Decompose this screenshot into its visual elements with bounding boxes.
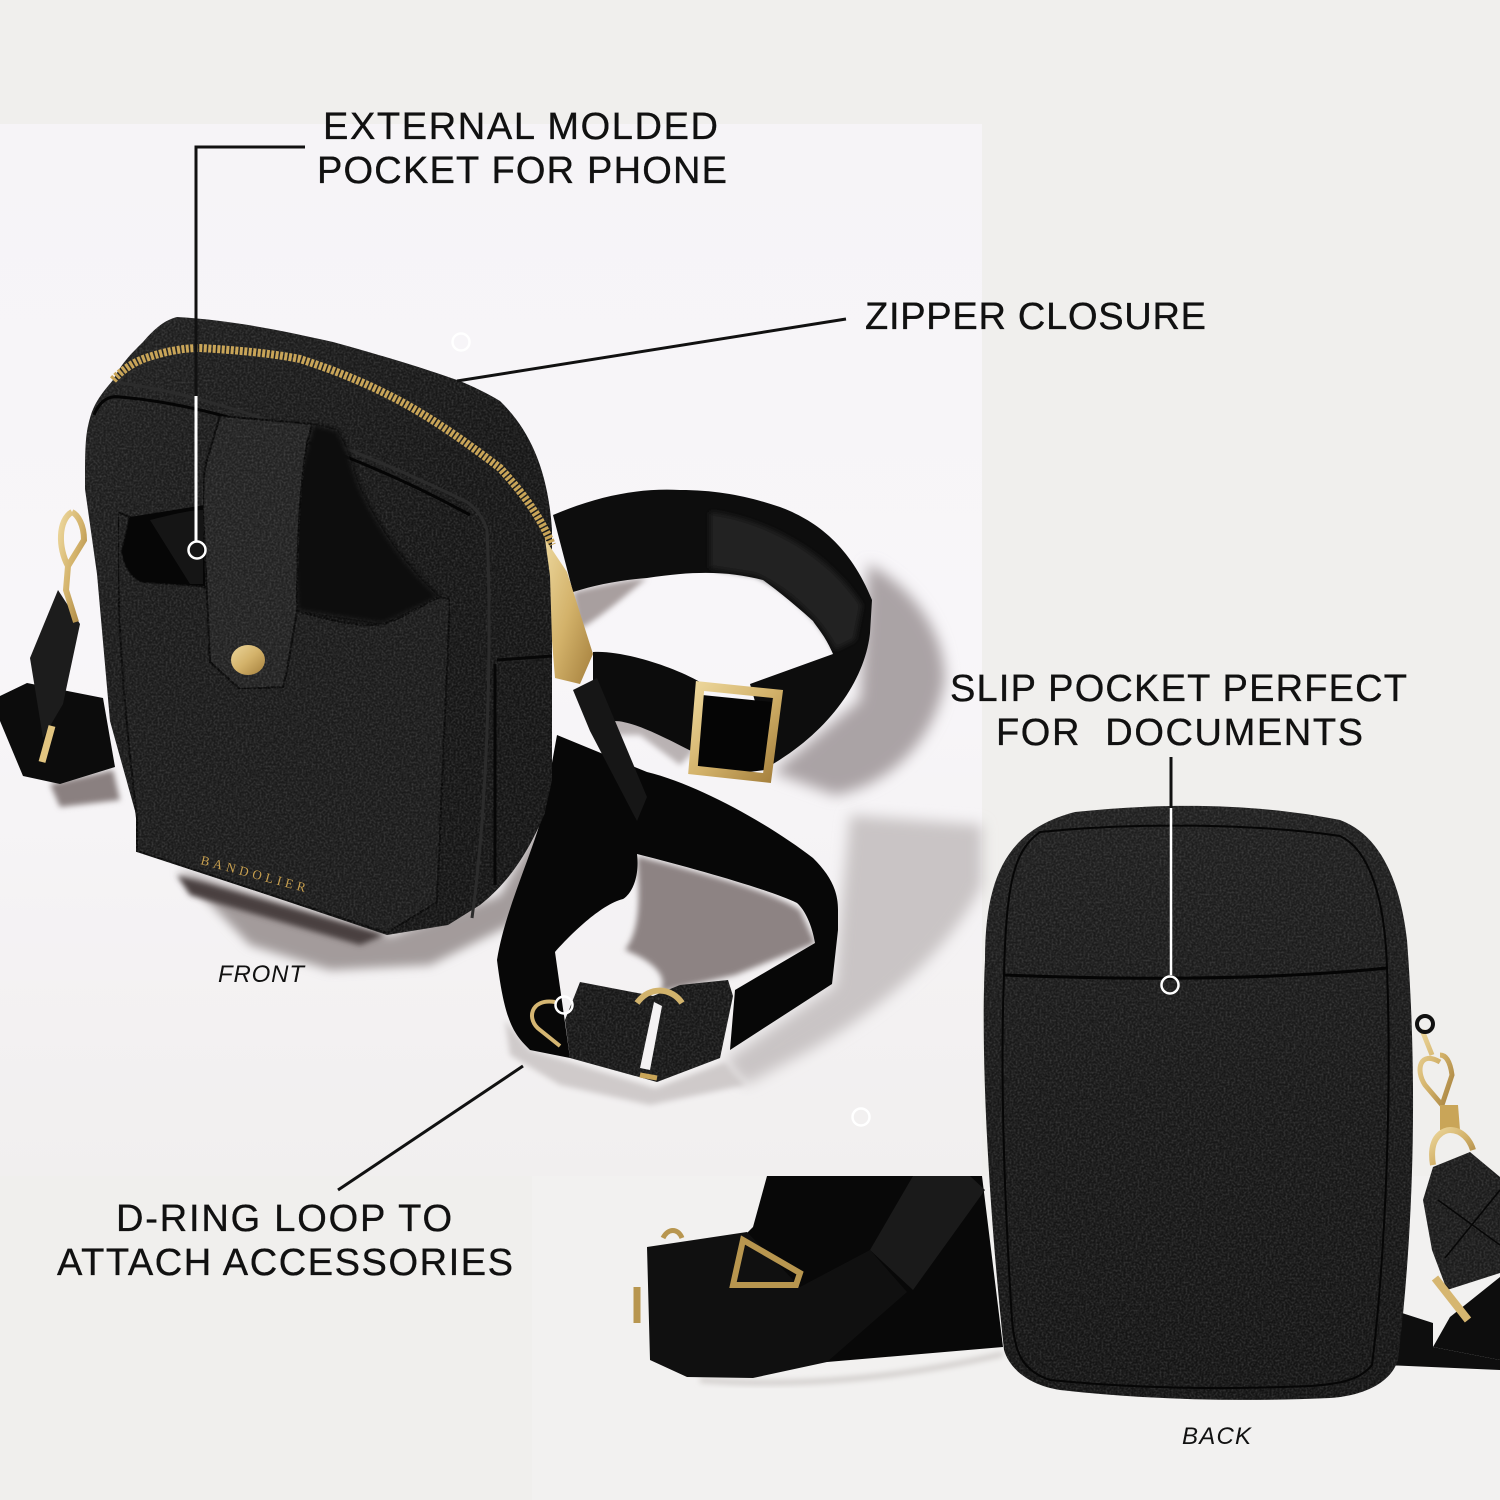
heading line two: ATTACH ACCESSORIES	[57, 1242, 513, 1284]
front photo panel	[0, 124, 982, 1176]
leader line	[196, 147, 305, 396]
marker	[556, 996, 572, 1014]
marker	[188, 542, 206, 558]
back photo	[637, 806, 1500, 1400]
heading: zipper closure: ZIPPER CLOSURE	[865, 296, 1206, 338]
back strap	[637, 1176, 1003, 1383]
dark interior behind pocket	[292, 424, 440, 624]
bag body	[85, 317, 647, 935]
panel seam	[113, 382, 489, 918]
back right strap and hardware	[1385, 1016, 1500, 1370]
heading: d-ring loop: D-RING LOOP TO	[116, 1198, 452, 1240]
back photo backdrop	[532, 1176, 1500, 1500]
back bag body	[984, 806, 1413, 1400]
snap hook	[61, 512, 84, 622]
zipper pull	[545, 539, 593, 684]
pocket flap tab	[203, 416, 313, 689]
heading line two: FOR DOCUMENTS	[996, 712, 1363, 754]
callout: zipper closure	[452, 296, 1206, 381]
heading line two: POCKET FOR PHONE	[317, 150, 727, 192]
strap: upper loop with buckle	[553, 490, 872, 778]
buckle	[693, 686, 778, 778]
pocket opening	[122, 505, 205, 586]
marker	[1162, 976, 1178, 994]
stray marker	[852, 1108, 870, 1126]
cast shadows	[50, 564, 982, 1105]
zipper pull leather	[573, 678, 647, 821]
snap button	[231, 645, 265, 675]
leader line	[457, 319, 846, 381]
zipper	[113, 348, 552, 545]
callout: external molded pocket	[188, 106, 727, 558]
heading: external molded pocket: EXTERNAL MOLDED	[323, 106, 718, 148]
back buckle	[733, 1240, 800, 1285]
leather strap connector and d-ring	[532, 980, 733, 1082]
molded pocket	[118, 512, 450, 933]
heading: slip pocket: SLIP POCKET PERFECT	[950, 668, 1407, 710]
brand mark: BANDOLIER	[199, 852, 308, 895]
callout: slip pocket	[950, 668, 1407, 994]
leader line	[1170, 757, 1172, 808]
left strap and leather tab	[0, 512, 115, 784]
callout: d-ring loop	[57, 996, 870, 1284]
marker	[452, 334, 470, 350]
leader line	[338, 1066, 523, 1190]
leader line inside bag	[194, 396, 198, 541]
strap: lower loop	[497, 735, 838, 1058]
label: front: FRONT	[218, 961, 306, 988]
label: back: BACK	[1182, 1423, 1252, 1450]
leader line inside bag	[1170, 808, 1172, 975]
